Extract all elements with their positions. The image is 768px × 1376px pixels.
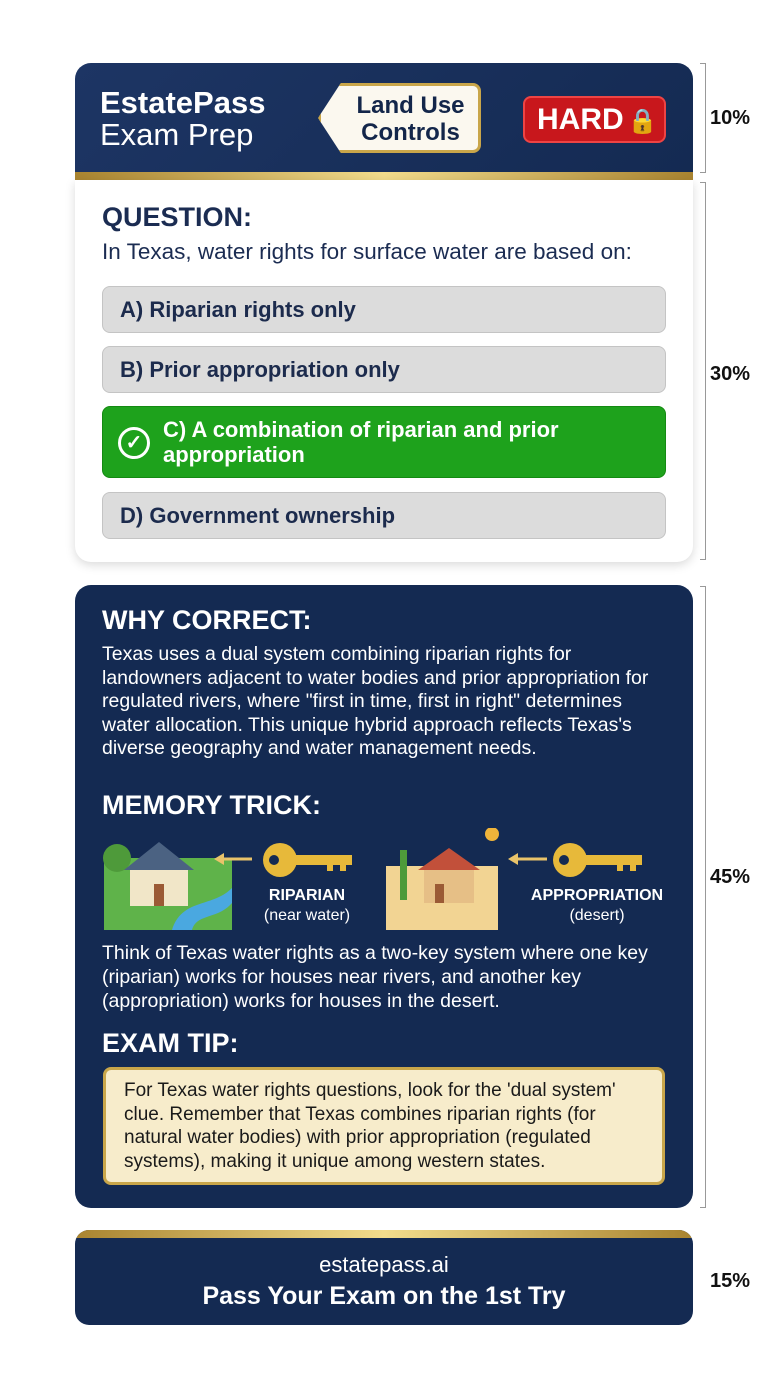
memory illustration [103, 828, 663, 930]
arrow appropriation [508, 853, 547, 865]
percent labels: 45% [710, 866, 750, 888]
brand title [100, 85, 265, 152]
question heading: QUESTION: [102, 202, 252, 232]
percent labels: 10% [710, 107, 750, 129]
memory trick heading: MEMORY TRICK: [102, 790, 321, 820]
footer [75, 1230, 693, 1325]
option D [102, 492, 666, 539]
percent labels: 30% [710, 363, 750, 385]
arrow riparian [214, 853, 252, 865]
memory illustration: (desert) [569, 907, 625, 924]
icon: key 2 [553, 843, 642, 877]
question text: In Texas, water rights for surface water are based on: [102, 239, 632, 264]
option C correct [102, 406, 666, 478]
label appropriation: APPROPRIATION [531, 887, 663, 904]
exam tip box [103, 1067, 665, 1185]
brand title: EstatePass [100, 85, 265, 120]
option B: B) Prior appropriation only [120, 356, 400, 382]
why correct heading: WHY CORRECT: [102, 605, 312, 635]
tag: Land Use Controls: Controls [361, 119, 460, 146]
exam tip box: For Texas water rights questions, look for the 'dual system' clue. Remember that Texas combines riparian rights (for natural water bodies) with prior appropriation (regulated systems), making it unique among western states. [124, 1080, 616, 1172]
panel: explanation [75, 585, 693, 1208]
icon: key 1 [263, 843, 352, 877]
why correct text: Texas uses a dual system combining riparian rights for landowners adjacent to water bodies and prior appropriation for regulated rivers, where "first in time, first in right" determines water allocation. This unique hybrid approach reflects Texas's diverse geography and water management needs. [102, 643, 648, 759]
option A: A) Riparian rights only [120, 296, 356, 322]
panel: question [75, 180, 693, 562]
memory text: Think of Texas water rights as a two-key system where one key (riparian) works for houses near rivers, and another key (appropriation) works for houses in the desert. [102, 942, 648, 1012]
icon: check: ✓ [126, 432, 142, 454]
option D: D) Government ownership [120, 502, 395, 528]
option C correct: C) A combination of riparian and prior [163, 417, 559, 442]
header panel [75, 63, 693, 180]
brand title: Exam Prep [100, 117, 253, 152]
tag: Land Use Controls: Land Use [356, 92, 465, 119]
badge: HARD: HARD🔒 [537, 103, 658, 136]
percent labels: 15% [710, 1270, 750, 1292]
option B [102, 346, 666, 393]
tag: Land Use Controls [318, 83, 481, 153]
exam tip heading: EXAM TIP: [102, 1028, 239, 1058]
label riparian: RIPARIAN [269, 887, 345, 904]
footer slogan: Pass Your Exam on the 1st Try [202, 1282, 566, 1310]
footer url: estatepass.ai [319, 1252, 449, 1277]
gold band [75, 172, 693, 180]
option C correct: appropriation [163, 442, 305, 467]
icon: riparian house [103, 842, 232, 930]
option A [102, 286, 666, 333]
icon: desert house [386, 827, 499, 930]
badge: HARD [523, 96, 666, 143]
icon: check [118, 427, 150, 459]
memory illustration: (near water) [264, 907, 350, 924]
